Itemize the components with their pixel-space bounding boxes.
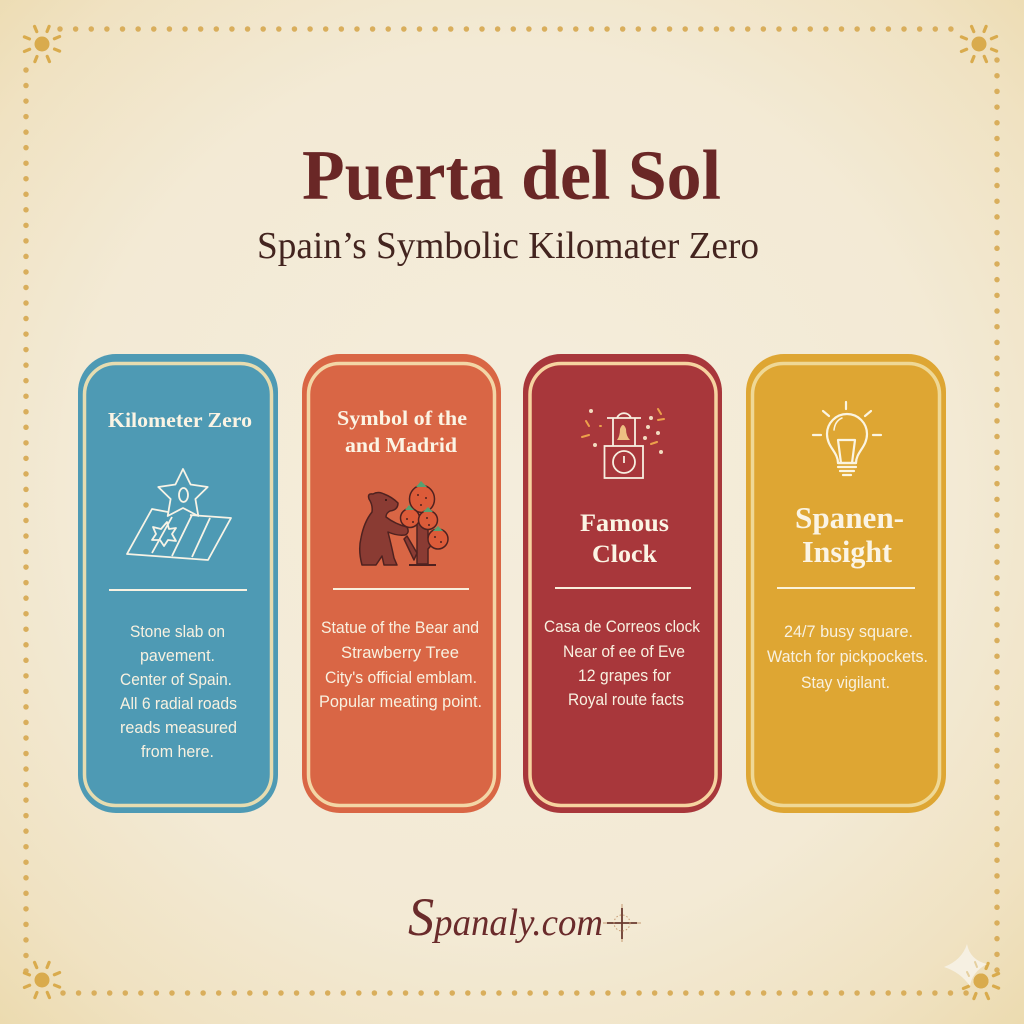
heading	[337, 406, 467, 457]
heading: Insight	[802, 534, 893, 569]
body text: City's official emblam.	[325, 668, 477, 687]
icon: compass rose	[603, 904, 641, 942]
body text: Royal route facts	[568, 690, 684, 709]
heading: and Madrid	[345, 433, 457, 457]
panel: Kilometer Zero	[78, 354, 278, 813]
icon: star over paving slab	[127, 469, 231, 560]
body text: Statue of the Bear and	[321, 618, 479, 637]
icon: sun bottom left	[17, 955, 67, 1005]
heading: Spanen-	[795, 500, 904, 535]
body text: Stay vigilant.	[801, 673, 890, 692]
heading: Symbol of the	[337, 406, 467, 430]
panel: Spanen-Insight	[746, 354, 946, 813]
body text	[544, 617, 700, 709]
body text: All 6 radial roads	[120, 694, 237, 713]
body text	[319, 618, 482, 711]
body text: from here.	[141, 742, 214, 761]
body text: Stone slab on	[130, 622, 225, 641]
heading	[795, 500, 904, 569]
heading: Kilometer Zero	[108, 408, 252, 432]
body text: Strawberry Tree	[341, 643, 459, 662]
icon: sun top left	[17, 19, 67, 69]
icon: sun bottom right	[956, 956, 1006, 1006]
body text: Popular meating point.	[319, 692, 482, 711]
icon: bear and strawberry tree	[360, 481, 448, 565]
panel: Symbol of the Bear	[302, 354, 501, 813]
body text: reads measured	[120, 718, 237, 737]
heading: Famous	[580, 510, 669, 537]
subtitle: Spain’s Symbolic Kilomater Zero	[257, 225, 759, 267]
body text: Casa de Correos clock	[544, 617, 700, 636]
body text: Center of Spain.	[120, 670, 232, 689]
body text: pavement.	[140, 646, 215, 665]
body text: Near of ee of Eve	[563, 642, 685, 661]
icon: sun top right	[954, 19, 1004, 69]
icon: clock tower with bell and confetti	[582, 409, 664, 478]
body text: 24/7 busy square.	[784, 622, 913, 641]
body text: Watch for pickpockets.	[767, 647, 928, 666]
icon: light bulb	[813, 402, 881, 475]
body text	[120, 622, 237, 761]
heading: Clock	[592, 541, 657, 568]
panel: Famous Clock	[523, 354, 722, 813]
body text	[767, 622, 928, 692]
title: Puerta del Sol	[302, 137, 721, 215]
icon: sparkle	[944, 944, 988, 988]
body text: 12 grapes for	[578, 666, 671, 685]
heading	[580, 510, 669, 568]
footer brand: Spanaly.com	[408, 887, 603, 947]
